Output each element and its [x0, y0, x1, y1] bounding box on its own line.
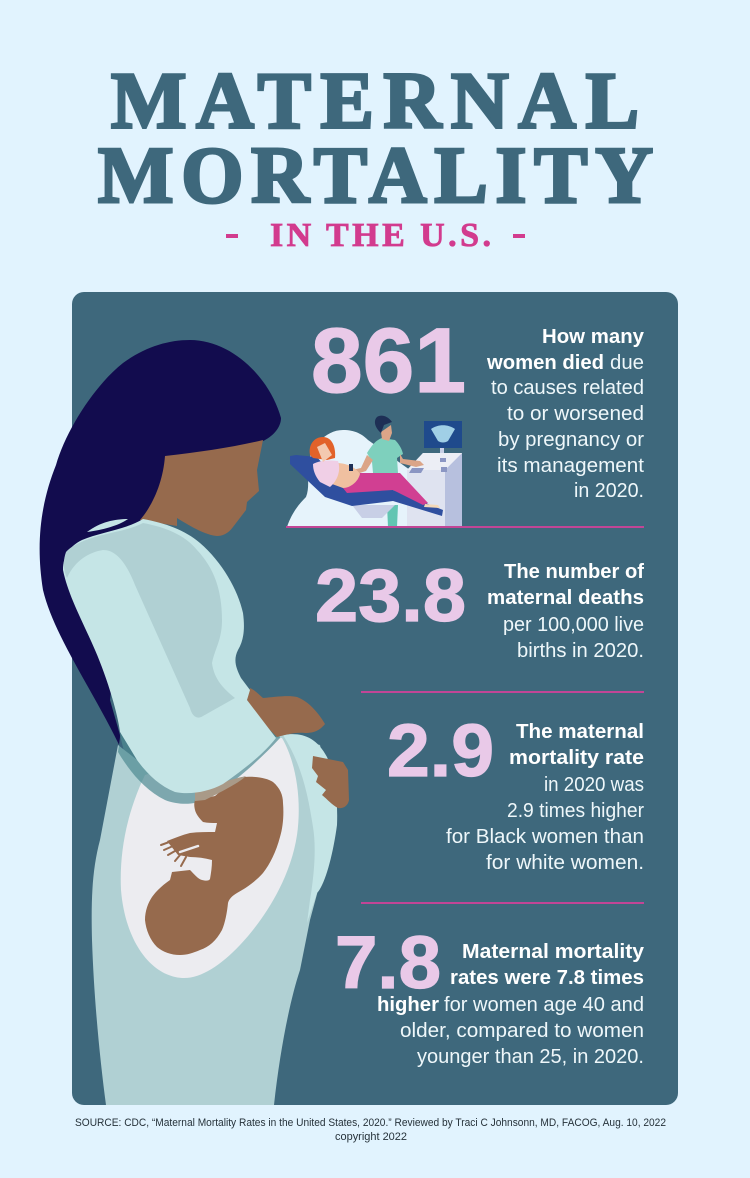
stat 4 text: for women age 40 and [444, 994, 644, 1016]
divider [286, 526, 644, 528]
stat 1 text: its management [497, 455, 644, 477]
stat 3 text: in 2020 was [544, 774, 644, 796]
stat 2 text: maternal deaths [487, 587, 644, 609]
probe [349, 464, 353, 471]
illustration: pregnant woman [40, 340, 349, 1105]
patient trousers [343, 473, 428, 505]
source note [75, 1117, 666, 1143]
stat 4 text: older, compared to women [400, 1020, 644, 1042]
patient shirt [313, 460, 339, 487]
stat 1 text: to causes related [491, 377, 644, 399]
fetus fingers [161, 841, 186, 866]
stat 1 number: 861 [311, 310, 466, 412]
stat 3 text: The maternal [516, 721, 644, 743]
monitor [424, 421, 462, 448]
machine body [407, 453, 462, 527]
nurse [350, 416, 424, 527]
stat 4 text [377, 941, 645, 1068]
stat 4 text: Maternal mortality [462, 941, 645, 963]
belly highlight [283, 734, 337, 923]
stat 2 number: 23.8 [315, 554, 466, 637]
title: MATERNAL [111, 58, 639, 146]
panel: statistics background [72, 292, 678, 1105]
womb [121, 738, 299, 978]
stat 1 text: women died [486, 352, 604, 374]
stat 4 text: higher [377, 994, 439, 1016]
subtitle: IN THE U.S. [270, 217, 491, 254]
patient foot [424, 504, 440, 508]
stat 3 text: 2.9 times higher [507, 800, 644, 822]
patient head [310, 437, 335, 460]
hand: lower [312, 756, 349, 808]
stat 3 text: for white women. [486, 852, 644, 874]
gown shading [64, 523, 235, 718]
stat 3 text: mortality rate [509, 747, 644, 769]
chair [290, 455, 443, 516]
stat 4 text: rates were 7.8 times [450, 967, 644, 989]
stat 4 text: younger than 25, in 2020. [417, 1046, 644, 1068]
hair sliver [87, 519, 128, 532]
sleeve shadow band [118, 720, 280, 804]
divider [361, 902, 644, 904]
source note: copyright 2022 [335, 1131, 407, 1143]
stat 3 text [446, 721, 644, 874]
divider [361, 691, 644, 693]
lower gown [92, 735, 337, 1105]
stat 2 text: births in 2020. [517, 640, 644, 662]
pedestal [352, 505, 395, 518]
stat 3 text: for Black women than [446, 826, 644, 848]
source note: SOURCE: CDC, “Maternal Mortality Rates in the United States, 2020.” Reviewed by Traci C Johnsonn, MD, FACOG, Aug. 10, 2022 [75, 1117, 666, 1129]
hair [40, 340, 281, 760]
stat 1 text: How many [542, 326, 645, 348]
upper gown and sleeve [63, 519, 276, 793]
stat 1 text: to or worsened [507, 403, 644, 425]
hand: upper [247, 688, 325, 737]
title: MORTALITY [98, 132, 653, 220]
stat 2 text [487, 561, 644, 662]
stat 3 number: 2.9 [387, 709, 494, 792]
title [98, 58, 653, 220]
stat 1 text: in 2020. [574, 480, 644, 502]
band over fetus [195, 776, 246, 801]
stat 1 text: by pregnancy or [498, 429, 644, 451]
stat 1 text: due [610, 352, 644, 374]
stat 2 text: per 100,000 live [503, 614, 644, 636]
skin: face and neck [140, 440, 263, 536]
patient belly [332, 463, 360, 488]
illustration: ultrasound scene [287, 416, 462, 527]
fetus [145, 777, 283, 955]
stat 1 text [486, 326, 645, 502]
backdrop [287, 430, 410, 527]
machine controls [409, 458, 447, 473]
stat 4 number: 7.8 [335, 921, 441, 1004]
stat 2 text: The number of [504, 561, 644, 583]
